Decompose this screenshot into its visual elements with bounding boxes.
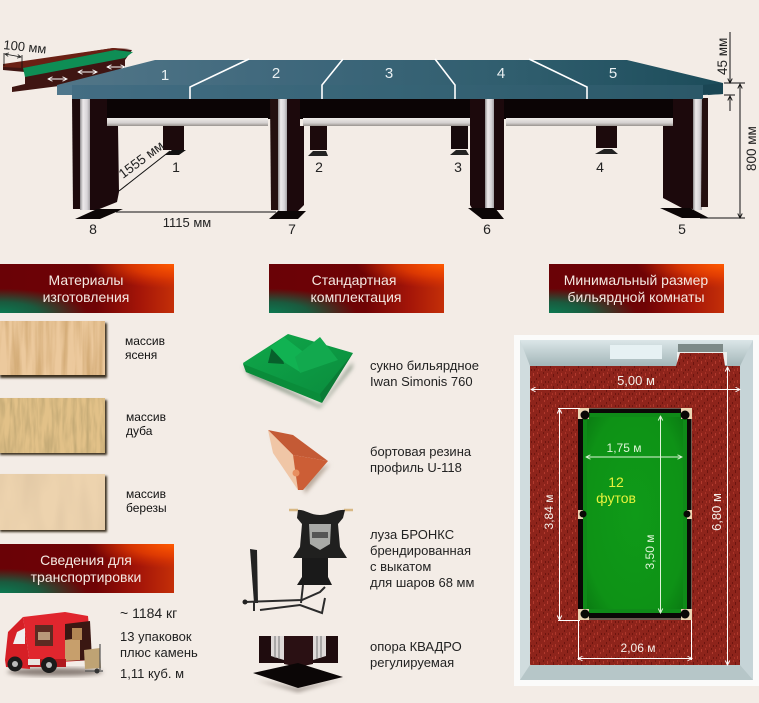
header: minimum room size	[549, 264, 724, 313]
leg numbers: 8	[89, 221, 97, 237]
dimension: 6,80 m: 6,80 м	[709, 493, 724, 531]
room plan	[514, 335, 759, 686]
segment numbers	[161, 65, 617, 84]
header: standard equipment: Стандартная	[312, 272, 396, 288]
header: transport info	[0, 544, 174, 593]
transport details	[120, 605, 198, 681]
transport details: 13 упаковок	[120, 629, 192, 644]
header: transport info: Сведения для	[40, 552, 132, 568]
segment lines	[190, 59, 587, 99]
dimension: 2,06 m	[578, 620, 692, 660]
label: leg adjustable: регулируемая	[370, 655, 454, 670]
carpet	[530, 353, 740, 665]
table size label: 12	[608, 474, 624, 490]
label: pocket: луза БРОНКС	[370, 527, 454, 542]
dimension: 45 mm	[715, 32, 745, 111]
label: pocket	[370, 527, 474, 590]
leg numbers: 5	[678, 221, 686, 237]
leg numbers: 7	[288, 221, 296, 237]
item: adjustable leg support	[253, 636, 345, 692]
header: minimum room size: бильярдной комнаты	[567, 289, 705, 305]
billiard table top view	[578, 408, 692, 620]
leg numbers	[89, 159, 686, 237]
leg numbers: 2	[315, 159, 323, 175]
leg numbers: 6	[483, 221, 491, 237]
dimension: 3,84 m: 3,84 м	[542, 495, 556, 529]
item: pocket	[242, 510, 353, 613]
rail cross-section with 100 mm dimension	[3, 37, 133, 92]
header: materials: Материалы	[49, 272, 123, 288]
table size label: футов	[596, 490, 636, 506]
room frame	[514, 335, 759, 686]
label: rubber profile: профиль U-118	[370, 460, 462, 475]
dimension: 1,75 m	[586, 441, 682, 457]
material: birch: березы	[126, 501, 167, 515]
dimension: 1555 mm: 1555 мм	[116, 138, 167, 181]
corner pockets	[578, 408, 692, 620]
dimension: 2,06 m: 2,06 м	[621, 641, 655, 655]
table top	[57, 59, 723, 99]
material: ash: ясеня	[125, 348, 157, 362]
label: leg support: опора КВАДРО	[370, 639, 462, 654]
transport details: 1,11 куб. м	[120, 666, 184, 681]
label: cloth brand: Iwan Simonis 760	[370, 374, 473, 389]
label: rubber: бортовая резина	[370, 444, 472, 459]
segment numbers: 5	[609, 65, 617, 82]
doorway	[678, 344, 723, 352]
label: cloth: сукно бильярдное	[370, 358, 479, 373]
dimension: 3,84 m	[542, 408, 580, 620]
walls	[520, 340, 753, 680]
billiard table side view	[57, 32, 759, 237]
segment numbers: 3	[385, 65, 393, 82]
dimension: 1,75 m: 1,75 м	[607, 441, 641, 455]
white arrows	[48, 67, 125, 79]
material: ash: массив	[125, 334, 165, 348]
back legs	[163, 124, 618, 156]
window	[610, 345, 662, 359]
dimension: 45 mm: 45 мм	[715, 38, 730, 75]
label: pocket: брендированная	[370, 543, 471, 558]
item: billiard cloth	[243, 334, 353, 408]
leg numbers: 4	[596, 159, 604, 175]
material: ash	[0, 321, 165, 378]
100 mm label: 100 мм	[3, 37, 47, 57]
dimension: 800 mm	[700, 84, 759, 218]
table apron	[85, 98, 695, 126]
material: oak	[0, 398, 166, 455]
dimension: 800 mm: 800 мм	[744, 126, 759, 171]
header: materials: изготовления	[43, 289, 129, 305]
header: standard equipment: комплектация	[311, 289, 401, 305]
header: standard equipment	[269, 264, 444, 313]
table size label	[596, 474, 636, 506]
table legs	[72, 98, 709, 219]
transport details: плюс камень	[120, 645, 198, 660]
header: minimum room size: Минимальный размер	[564, 272, 708, 288]
label: pocket: с выкатом	[370, 559, 431, 574]
dimension: 5,00 m: 5,00 м	[617, 373, 655, 388]
segment numbers: 4	[497, 65, 505, 82]
material: oak: дуба	[126, 424, 153, 438]
transport details: ~ 1184 кг	[120, 605, 177, 621]
label: pocket: для шаров 68 мм	[370, 575, 474, 590]
leg numbers: 1	[172, 159, 180, 175]
segment numbers: 1	[161, 67, 169, 84]
icon: red delivery truck	[5, 612, 103, 676]
material: birch: массив	[126, 487, 166, 501]
segment numbers: 2	[272, 65, 280, 82]
header: transport info: транспортировки	[31, 569, 141, 585]
dimension: 1115 mm: 1115 мм	[163, 215, 211, 230]
material: birch	[0, 474, 167, 532]
header: materials	[0, 264, 174, 313]
leg numbers: 3	[454, 159, 462, 175]
dimension: 3,50 m: 3,50 м	[643, 535, 657, 569]
material: oak: массив	[126, 410, 166, 424]
item: rubber profile	[268, 430, 330, 494]
